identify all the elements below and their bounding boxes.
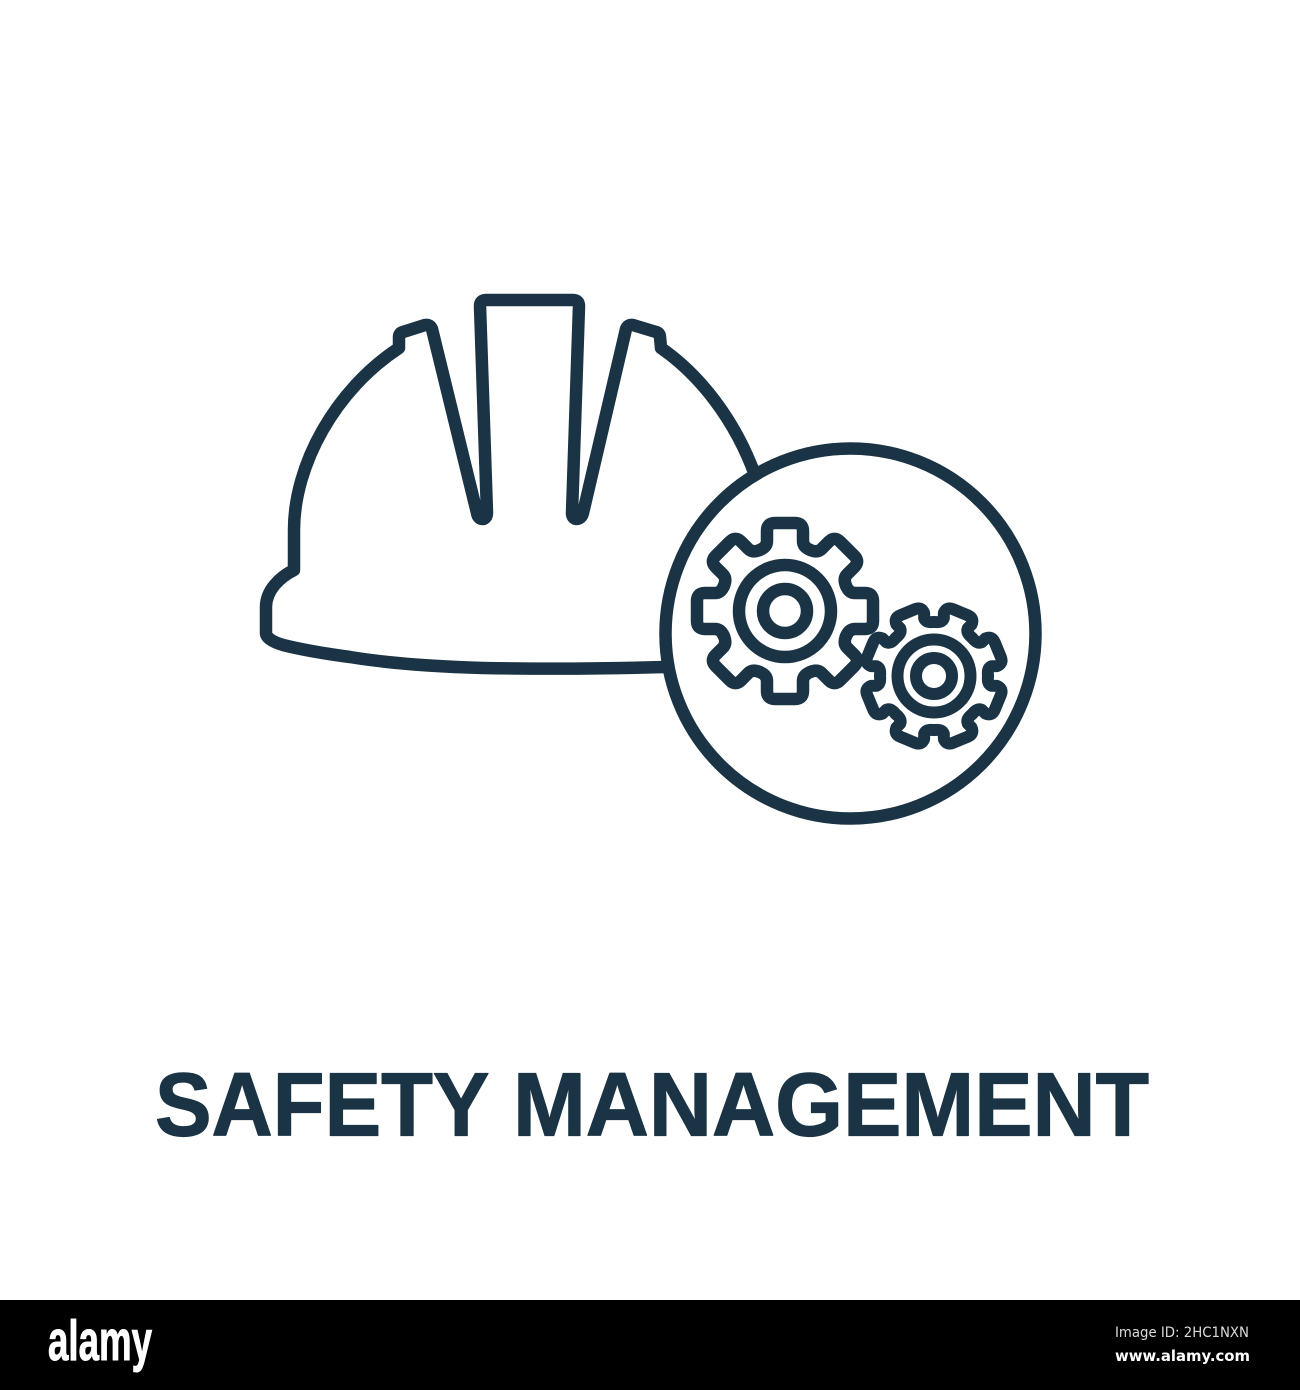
icon: gear circle badge — [666, 448, 1036, 818]
title: MANAGEMENT — [513, 1056, 1149, 1156]
footer logo: alamy — [48, 1309, 152, 1373]
footer url: www.alamy.com — [1115, 1347, 1250, 1365]
image id: Image ID: 2HC1NXN — [1115, 1325, 1249, 1341]
icon: large gear — [697, 523, 873, 699]
icon: hard hat — [266, 300, 755, 669]
title: SAFETY — [155, 1056, 490, 1156]
title — [155, 1056, 1149, 1156]
icon: small gear — [862, 604, 1006, 748]
footer bar — [0, 1300, 1300, 1390]
